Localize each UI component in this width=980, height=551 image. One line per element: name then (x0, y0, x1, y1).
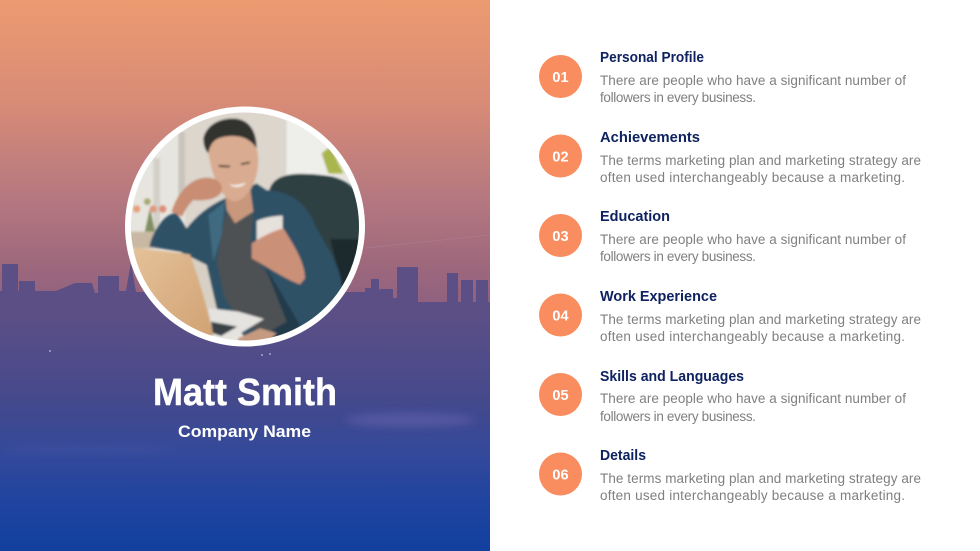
t-shirt (217, 212, 287, 333)
name: Matt Smith (153, 372, 337, 414)
number badge 04: 04 (552, 308, 569, 324)
heading 05: Skills and Languages (600, 369, 744, 385)
neck (225, 187, 253, 223)
description 04: The terms marketing plan and marketing strategy are (600, 312, 921, 327)
heading 03: Education (600, 209, 670, 225)
item 02: achievements (539, 130, 921, 185)
panel: left gradient skyline background (0, 0, 490, 551)
company name: Company Name (178, 422, 311, 441)
description 03: followers in every business. (600, 249, 756, 264)
number badge 03 (539, 214, 582, 257)
hand with phone (252, 228, 305, 284)
number badge 05 (539, 373, 582, 416)
heading 01: Personal Profile (600, 50, 704, 66)
heading 04: Work Experience (600, 289, 717, 305)
description 01 (600, 73, 906, 105)
laptop lid (133, 247, 214, 336)
backdrop behind laptop (180, 252, 220, 335)
description 06 (600, 471, 921, 503)
description 01: followers in every business. (600, 90, 756, 105)
hand on cheek (172, 178, 222, 217)
description 05 (600, 391, 906, 424)
description 04: often used interchangeably because a marketing. (600, 329, 905, 344)
item 01: personal profile (539, 50, 906, 105)
icon: armchair (268, 172, 359, 289)
profile photo (120, 100, 370, 352)
number badge 01 (539, 55, 582, 98)
number badge 02: 02 (552, 150, 569, 166)
hair (203, 119, 257, 153)
description 06: The terms marketing plan and marketing strategy are (600, 471, 921, 486)
phone (257, 216, 283, 252)
number badge 04 (539, 294, 582, 336)
description 03: There are people who have a significant number of (600, 232, 906, 247)
heading 06: Details (600, 448, 646, 464)
white ring (125, 106, 365, 346)
laptop base (208, 308, 264, 338)
item 05: skills and languages (539, 369, 906, 424)
description 05: followers in every business. (600, 409, 756, 424)
number badge 05: 05 (552, 388, 569, 404)
description 05: There are people who have a significant number of (600, 391, 906, 406)
description 03 (600, 232, 906, 264)
number badge 01: 01 (552, 70, 569, 86)
description 06: often used interchangeably because a marketing. (600, 488, 905, 503)
number badge 06 (539, 452, 582, 496)
item 04: work experience (539, 289, 921, 344)
description 02: often used interchangeably because a marketing. (600, 170, 905, 185)
number badge 02 (539, 134, 582, 178)
number badge 03: 03 (552, 229, 569, 245)
number badge 06: 06 (552, 468, 569, 484)
description 02: The terms marketing plan and marketing strategy are (600, 153, 921, 168)
jacket (149, 183, 342, 348)
item 06: details (539, 448, 921, 503)
item 03: education (539, 209, 906, 264)
description 02 (600, 153, 921, 185)
heading 02: Achievements (600, 130, 700, 146)
face (208, 133, 258, 202)
description 01: There are people who have a significant number of (600, 73, 906, 88)
description 04 (600, 312, 921, 344)
